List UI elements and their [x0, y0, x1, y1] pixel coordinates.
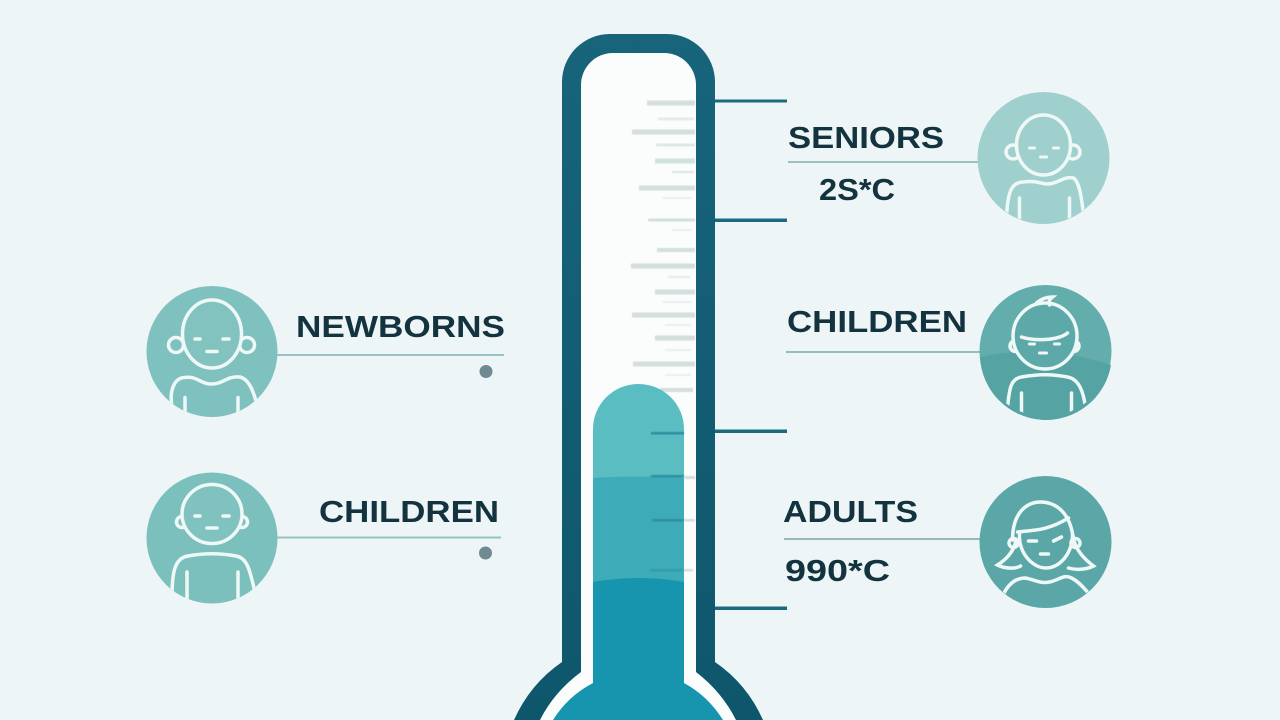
thermometer [514, 34, 763, 720]
fluid ticks on glass [684, 476, 695, 572]
adults connector line [784, 538, 980, 540]
children value dot [479, 546, 492, 560]
children connector line [786, 351, 980, 353]
infographic canvas [146, 34, 1112, 720]
newborns heading: NEWBORNS [296, 309, 505, 344]
label: newborns [277, 309, 505, 378]
children heading: CHILDREN [319, 494, 499, 529]
adults heading: ADULTS [783, 494, 918, 529]
newborns connector line [277, 354, 504, 356]
children heading: CHILDREN [787, 304, 967, 339]
fluid bottom tier and bulb [553, 578, 723, 720]
fluid middle tier [593, 476, 684, 582]
icon: newborn [146, 286, 278, 417]
icon: child right [980, 285, 1112, 420]
thermometer glass interior [540, 53, 736, 720]
seniors connector line [788, 161, 978, 163]
seniors heading: SENIORS [788, 120, 944, 155]
newborns value dot [480, 365, 492, 378]
scale ticks inside tube [631, 100, 695, 392]
label: seniors [788, 120, 978, 207]
external scale markers [715, 100, 787, 610]
seniors value: 2S*C [819, 172, 895, 207]
icon: adult [980, 476, 1112, 608]
adults value: 990*C [785, 553, 890, 588]
icon: senior [978, 92, 1110, 224]
fluid top tier [593, 384, 684, 480]
thermometer outer casing [514, 34, 763, 720]
label: adults [783, 494, 980, 588]
scale ticks over fluid [650, 432, 684, 572]
children connector line [277, 536, 501, 538]
label: children left [277, 494, 501, 560]
icon: child left [146, 472, 278, 604]
